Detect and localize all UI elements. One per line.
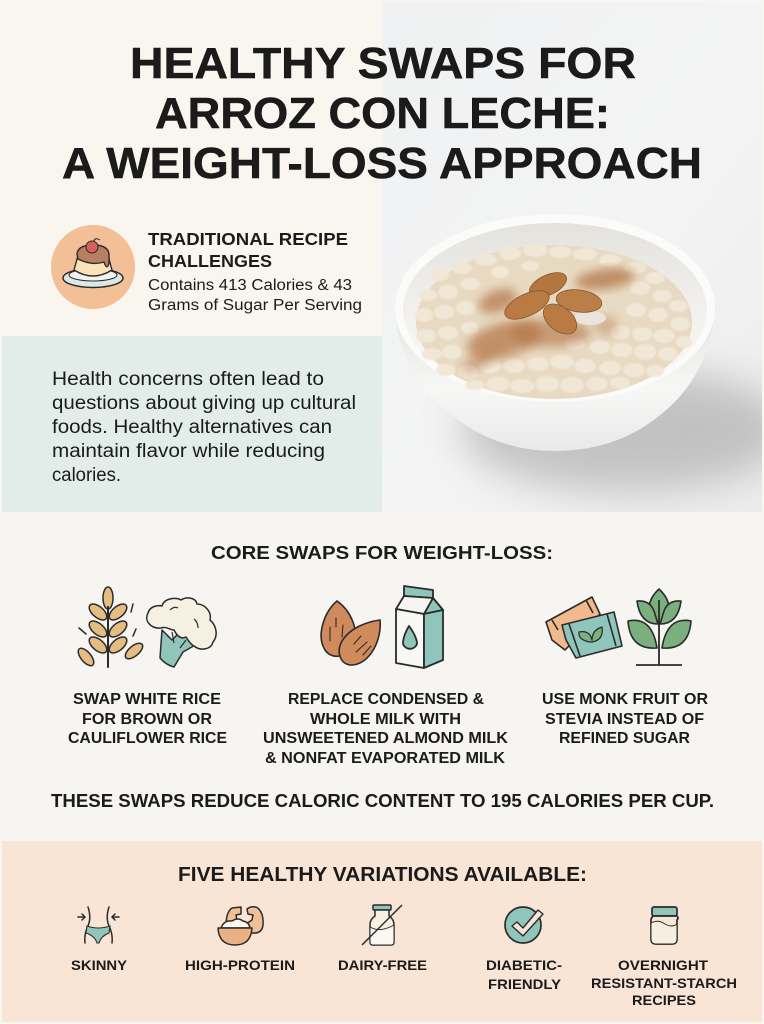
label: rice swap <box>68 691 227 747</box>
label: milk swap <box>263 691 509 767</box>
text block: health concerns: Health concerns often lead to <box>52 369 324 390</box>
icon: overnight jar <box>651 907 678 944</box>
icon: wheat stalk <box>75 587 145 668</box>
heading: core swaps: CORE SWAPS FOR WEIGHT-LOSS: <box>211 543 553 563</box>
text block: health concerns <box>52 369 356 486</box>
text block: health concerns: maintain flavor while reducing <box>52 441 325 462</box>
icon: stevia plant <box>628 589 691 665</box>
label: overnight resistant-starch: RESISTANT-STARCH <box>591 975 737 991</box>
label: rice swap: SWAP WHITE RICE <box>73 691 221 708</box>
label: sugar swap: USE MONK FRUIT OR <box>542 691 708 708</box>
icon: skinny waist <box>78 907 119 943</box>
label: milk swap: WHOLE MILK WITH <box>310 711 461 728</box>
title: HEALTHY SWAPS FOR <box>130 39 636 88</box>
icon: flan dessert <box>51 225 135 309</box>
heading: traditional recipe challenges: TRADITIONAL RECIPE <box>148 229 348 249</box>
almonds <box>504 272 602 334</box>
label: overnight resistant-starch: OVERNIGHT <box>618 957 708 973</box>
text block: health concerns: questions about giving up cultural <box>52 393 356 414</box>
label: sugar swap: REFINED SUGAR <box>559 730 690 747</box>
label: rice swap: FOR BROWN OR <box>82 711 212 728</box>
callout: calorie reduction: THESE SWAPS REDUCE CALORIC CONTENT TO 195 CALORIES PER CUP. <box>51 791 714 811</box>
label: overnight resistant-starch: RECIPES <box>632 992 696 1008</box>
label: milk swap: & NONFAT EVAPORATED MILK <box>265 750 506 767</box>
label: dairy-free: DAIRY-FREE <box>338 957 427 973</box>
label: diabetic-friendly: DIABETIC- <box>486 957 562 973</box>
label: diabetic-friendly <box>486 957 562 992</box>
icon: sweetener packets <box>546 597 622 658</box>
panel: title background left <box>2 2 382 336</box>
icon: milk carton <box>396 586 443 668</box>
label: milk swap: UNSWEETENED ALMOND MILK <box>263 730 509 747</box>
icon: cauliflower <box>147 598 216 667</box>
title: ARROZ CON LECHE: <box>155 89 610 138</box>
photo: bowl of rice pudding with almonds <box>395 214 764 492</box>
panel: core swaps background <box>2 512 762 841</box>
text block: calories and sugar: Contains 413 Calories & 43 <box>148 277 352 294</box>
title: A WEIGHT-LOSS APPROACH <box>62 139 702 188</box>
text block: calories and sugar: Grams of Sugar Per Serving <box>148 297 362 314</box>
label: sugar swap: STEVIA INSTEAD OF <box>545 711 704 728</box>
panel: intro text background <box>2 336 382 512</box>
icon: diabetic-friendly check <box>505 907 543 943</box>
icon: high-protein bowl <box>218 907 263 945</box>
label: skinny: SKINNY <box>71 957 128 973</box>
panel: photo background <box>382 2 762 512</box>
label: diabetic-friendly: FRIENDLY <box>488 976 562 992</box>
label: sugar swap <box>542 691 708 747</box>
title <box>62 39 702 188</box>
label: high-protein: HIGH-PROTEIN <box>185 957 295 973</box>
label: milk swap: REPLACE CONDENSED & <box>288 691 484 708</box>
label: overnight resistant-starch <box>591 957 737 1008</box>
icon: almonds <box>321 601 380 665</box>
heading: five variations: FIVE HEALTHY VARIATIONS AVAILABLE: <box>178 864 587 886</box>
icon: dairy-free bottle <box>362 905 402 945</box>
label: rice swap: CAULIFLOWER RICE <box>68 730 227 747</box>
panel: variations background <box>2 841 762 1022</box>
text block: health concerns: foods. Healthy alternatives can <box>52 417 332 438</box>
text block: calories and sugar <box>148 277 362 314</box>
heading: traditional recipe challenges <box>148 229 348 271</box>
text block: health concerns: calories. <box>52 465 121 486</box>
heading: traditional recipe challenges: CHALLENGES <box>148 251 272 271</box>
